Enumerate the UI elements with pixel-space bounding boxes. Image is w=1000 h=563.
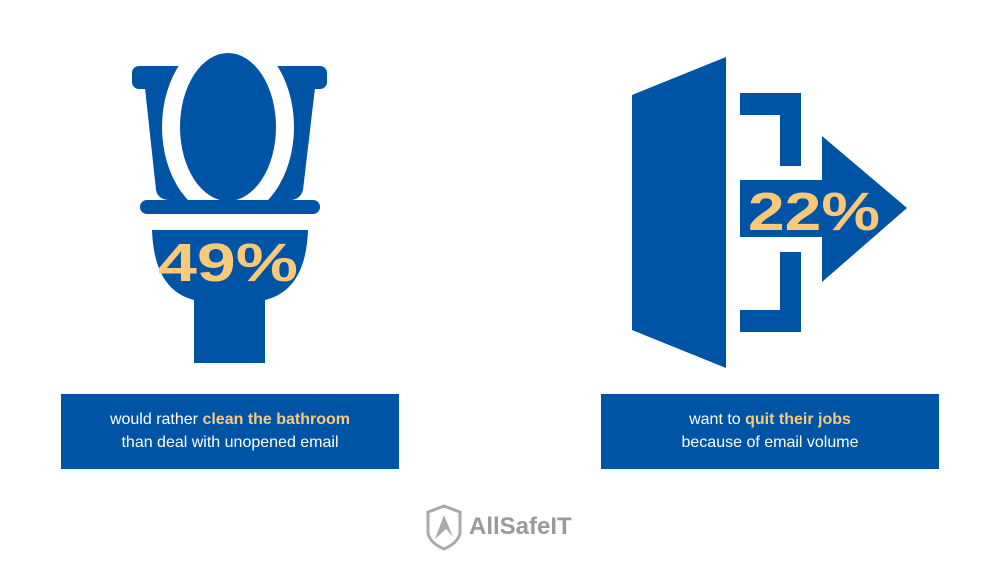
seat bar [140, 200, 320, 214]
logo: AllSafeIT: AllSafeIT [469, 513, 572, 540]
caption: left: would rather clean the bathroom [110, 411, 350, 428]
caption: left [61, 394, 399, 469]
door [632, 57, 726, 368]
arrow [740, 136, 907, 282]
tank [132, 35, 327, 219]
bowl [152, 230, 308, 363]
stat 22%: 22% [748, 182, 880, 242]
caption: left: than deal with unopened email [121, 434, 339, 451]
brackets [740, 93, 801, 166]
stat 49%: 49% [158, 233, 298, 293]
logo: AllSafeIT [426, 504, 572, 550]
caption: right: because of email volume [682, 434, 858, 451]
caption: right: want to quit their jobs [689, 411, 851, 428]
caption: right [601, 394, 939, 469]
